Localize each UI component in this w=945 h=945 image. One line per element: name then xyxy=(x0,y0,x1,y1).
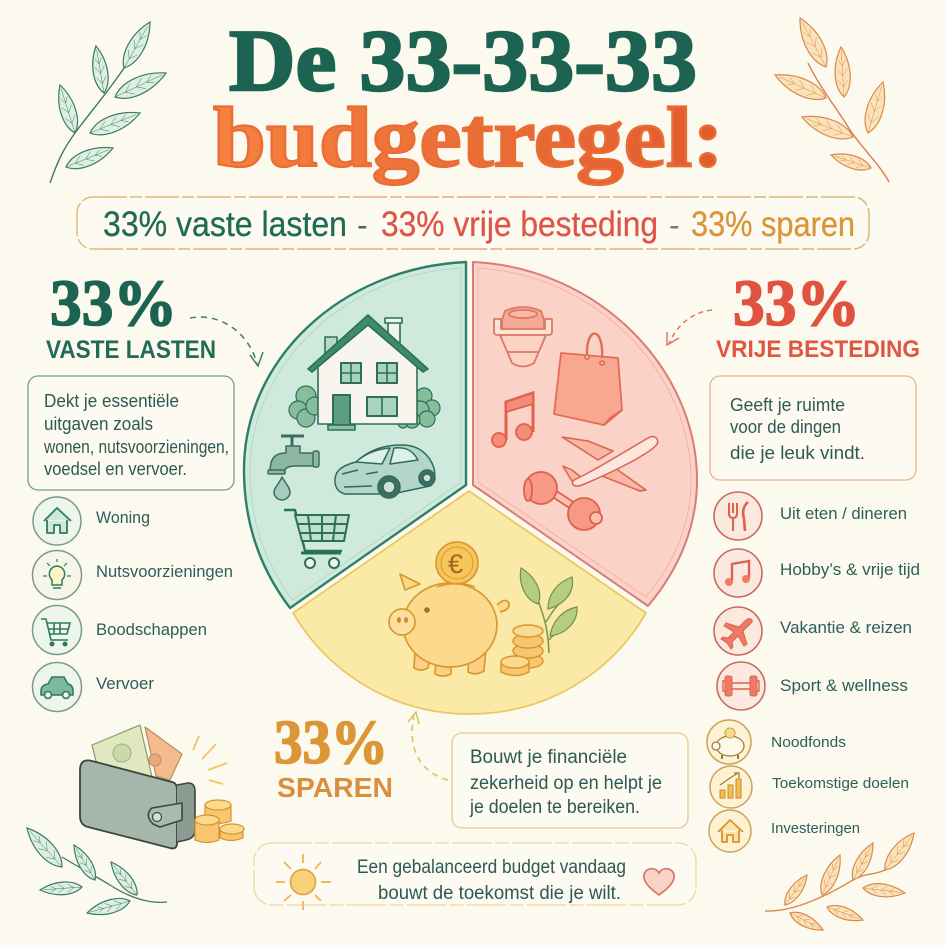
icon: shopping cart xyxy=(284,510,349,568)
item: Hobby's en vrije tijd: Hobby’s & vrije tijd xyxy=(780,561,920,579)
item: Vakantie en reizen xyxy=(714,607,912,655)
icon: coin stack xyxy=(501,625,543,676)
text box: vaste lasten: wonen, nutsvoorzieningen, xyxy=(43,437,229,457)
coins beside wallet xyxy=(195,800,244,842)
decoration: top-left green branch xyxy=(50,18,170,183)
item: Uit eten / dineren: Uit eten / dineren xyxy=(780,505,907,523)
icon: dumbbell xyxy=(524,472,602,530)
item: Boodschappen xyxy=(32,606,207,654)
icon: heart xyxy=(644,869,674,895)
icon: shopping bag xyxy=(554,334,622,425)
list: sparen xyxy=(707,720,909,852)
left heading: vaste lasten: 33% xyxy=(50,267,177,340)
illustration: wallet with money xyxy=(80,725,244,848)
item: Boodschappen: Boodschappen xyxy=(96,621,207,639)
title line 1: De 33-33-33 xyxy=(229,13,697,110)
icon: car xyxy=(335,445,435,498)
item: Investeringen xyxy=(709,810,860,852)
footer banner xyxy=(254,843,696,910)
pie slice: vaste lasten xyxy=(244,262,466,608)
icon: house xyxy=(289,315,440,430)
title xyxy=(213,13,724,185)
separator: - xyxy=(357,207,368,243)
icon: sun xyxy=(276,854,331,910)
title line 2: budgetregel: xyxy=(213,89,724,185)
sparkle lines xyxy=(193,736,227,784)
item: Vakantie en reizen: Vakantie & reizen xyxy=(780,619,912,637)
icon: airplane xyxy=(562,437,658,491)
label: sparen: SPAREN xyxy=(277,772,393,803)
decoration: top-right orange branch xyxy=(772,14,891,182)
item: Vervoer: Vervoer xyxy=(96,675,155,693)
item: Noodfonds: Noodfonds xyxy=(771,734,846,751)
footer text: Een gebalanceerd budget vandaag xyxy=(357,857,626,878)
arrow: vrije besteding to slice xyxy=(667,310,712,345)
item: Toekomstige doelen xyxy=(710,766,909,808)
item: Woning: Woning xyxy=(96,509,150,527)
text box: sparen xyxy=(452,733,688,828)
text box: vaste lasten xyxy=(28,376,234,490)
icon: water drop xyxy=(274,477,290,500)
right heading: vrije besteding: 33% xyxy=(733,267,860,340)
arrow: vaste lasten to slice xyxy=(190,317,263,366)
pie chart xyxy=(244,262,697,714)
item: Investeringen: Investeringen xyxy=(771,820,860,837)
pie slice: vrije besteding xyxy=(473,262,697,606)
item: Hobby's en vrije tijd xyxy=(714,549,920,597)
text box: vaste lasten: Dekt je essentiële xyxy=(44,391,179,411)
text box: vaste lasten: uitgaven zoals xyxy=(44,414,153,434)
subtitle: vrije besteding: 33% vrije besteding xyxy=(381,205,658,244)
text box: sparen: je doelen te bereiken. xyxy=(469,797,640,818)
left heading: vaste lasten xyxy=(46,267,216,364)
separator: - xyxy=(669,207,680,243)
item: Nutsvoorzieningen: Nutsvoorzieningen xyxy=(96,563,233,581)
icon: piggy bank with coin xyxy=(389,542,509,676)
icon: plant sprout xyxy=(520,568,577,653)
decoration: bottom-right orange branch xyxy=(765,829,920,935)
item: Woning xyxy=(33,497,150,545)
item: Vervoer xyxy=(32,662,155,712)
item: Nutsvoorzieningen xyxy=(32,550,233,600)
item: Sport en wellness xyxy=(717,662,908,710)
text box: vaste lasten: voedsel en vervoer. xyxy=(44,459,187,479)
text box: sparen: zekerheid op en helpt je xyxy=(470,773,662,794)
text box: sparen: Bouwt je financiële xyxy=(470,747,627,768)
text box: vrije besteding xyxy=(710,376,916,480)
footer banner: bouwt de toekomst die je wilt. xyxy=(378,883,621,904)
euro sign: € xyxy=(448,549,463,579)
item: Toekomstige doelen: Toekomstige doelen xyxy=(772,775,909,792)
pie slice: sparen xyxy=(293,491,646,714)
subtitle: sparen: 33% sparen xyxy=(691,205,855,244)
decoration: bottom-left green branch xyxy=(21,823,167,919)
label: vaste lasten: VASTE LASTEN xyxy=(46,336,216,364)
item: Uit eten / dineren xyxy=(714,492,907,540)
item: Noodfonds xyxy=(707,720,846,764)
text box: vrije besteding: Geeft je ruimte xyxy=(730,395,845,415)
right heading: vrije besteding xyxy=(716,267,920,363)
subtitle: vaste lasten: 33% vaste lasten xyxy=(103,205,347,244)
text box: vrije besteding: die je leuk vindt. xyxy=(730,443,865,463)
icon: cup xyxy=(494,307,552,366)
icon: music note xyxy=(492,393,533,447)
list: vaste lasten xyxy=(32,497,233,712)
list: vrije besteding xyxy=(714,492,920,710)
item: Sport en wellness: Sport & wellness xyxy=(780,677,908,695)
arrow: sparen to slice xyxy=(408,712,448,780)
label: vrije besteding: VRIJE BESTEDING xyxy=(716,336,920,363)
text box: vrije besteding: voor de dingen xyxy=(730,417,841,437)
icon: water tap xyxy=(268,436,319,500)
heading: sparen: 33% xyxy=(274,709,388,777)
subtitle banner xyxy=(77,197,869,249)
